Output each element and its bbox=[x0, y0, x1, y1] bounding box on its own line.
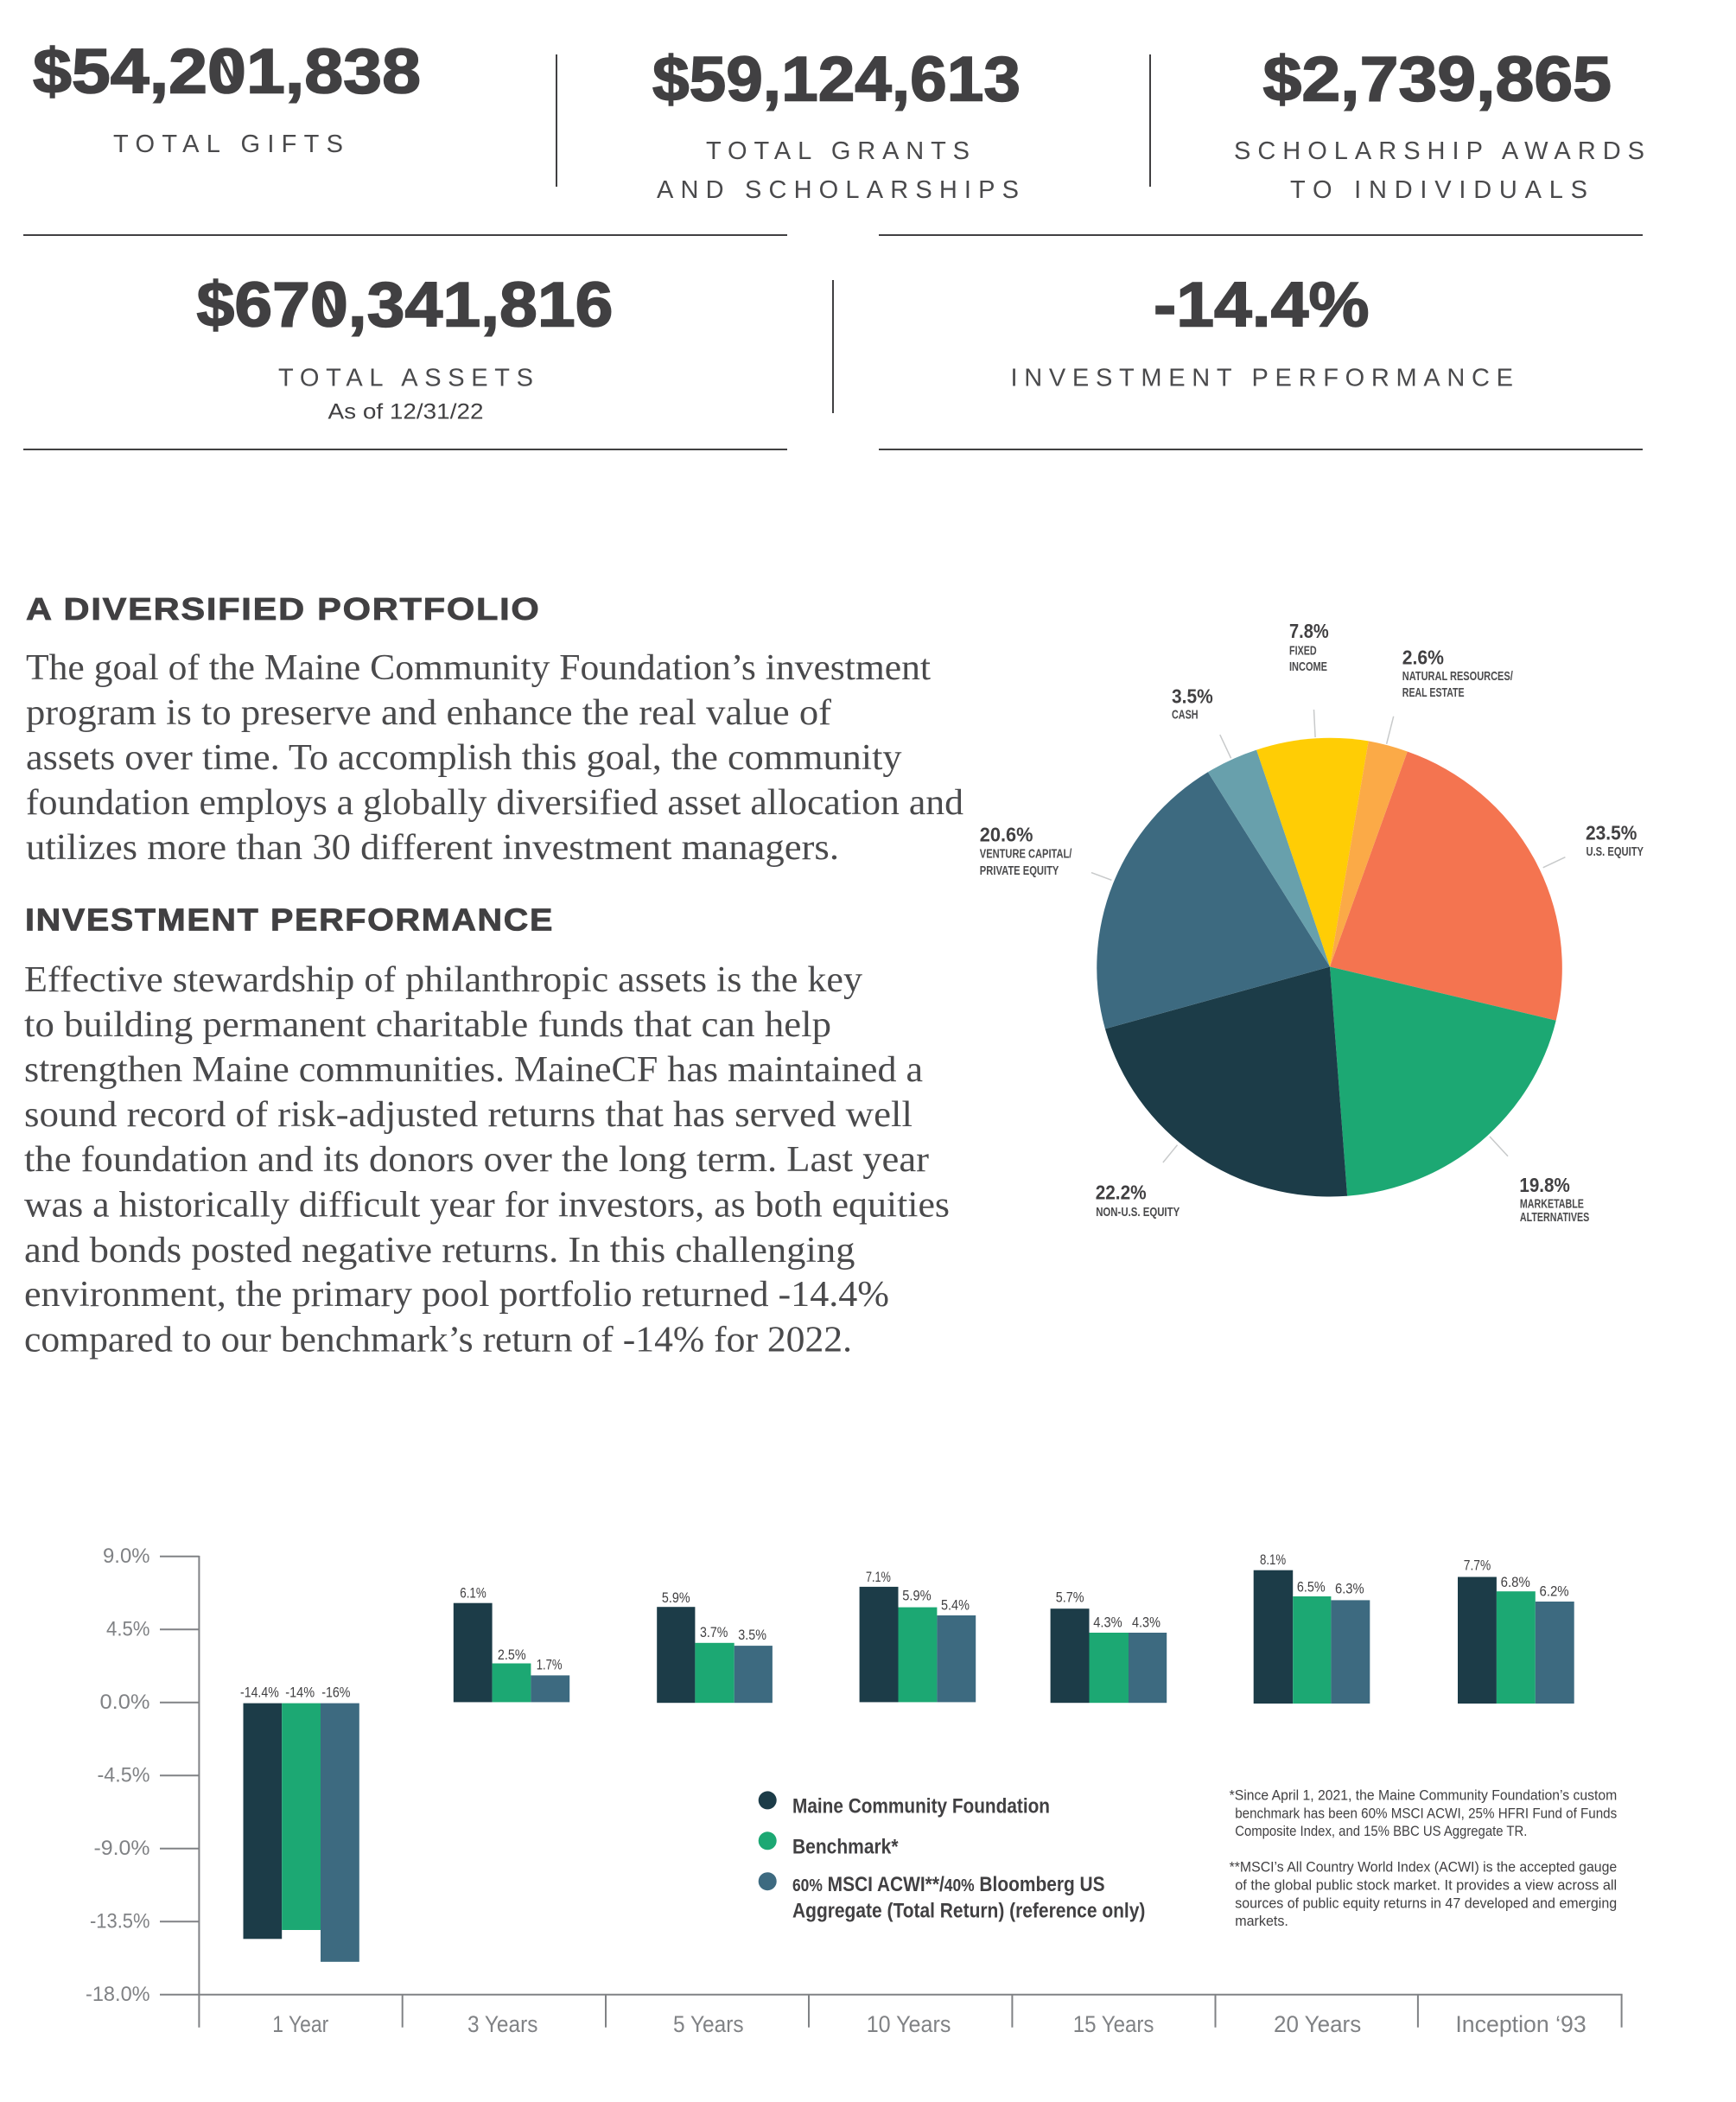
label: non-U.S. equity: NON-U.S. EQUITY bbox=[1096, 1205, 1180, 1220]
bars: 15 years bbox=[1051, 1590, 1167, 1703]
slice: cash bbox=[1208, 750, 1330, 966]
bars: 20 years: 6.5% bbox=[1297, 1580, 1326, 1596]
stat: investment performance bbox=[1011, 271, 1513, 392]
stat: total gifts bbox=[33, 36, 421, 158]
footnotes: benchmark has been 60% MSCI ACWI, 25% HFRI Fund of Funds bbox=[1235, 1805, 1617, 1821]
bars: 3 years bbox=[454, 1586, 569, 1702]
label: non-U.S. equity: 22.2% bbox=[1096, 1182, 1147, 1204]
text block: performance description: to building permanent charitable funds that can help bbox=[24, 1005, 831, 1045]
footnotes: of the global public stock market. It provides a view across all bbox=[1235, 1877, 1617, 1893]
x axis labels bbox=[272, 2011, 1587, 2037]
bars: 1 year: -14.4% bbox=[240, 1685, 279, 1701]
label: natural resources bbox=[1402, 647, 1513, 700]
legend item: benchmark bbox=[759, 1831, 899, 1858]
stat: scholarship awards to individuals bbox=[1234, 44, 1644, 204]
x axis labels: 5 Years bbox=[673, 2011, 744, 2037]
bars: inception 1993 bbox=[1458, 1557, 1574, 1704]
legend bbox=[759, 1791, 1145, 1922]
text block: performance description: the foundation and its donors over the long term. Last year bbox=[24, 1140, 929, 1180]
label: venture capital: 20.6% bbox=[980, 823, 1033, 845]
stat: total gifts: TOTAL GIFTS bbox=[113, 131, 343, 158]
legend item: benchmark: Benchmark* bbox=[792, 1836, 899, 1858]
x axis labels: 10 Years bbox=[867, 2011, 951, 2037]
x axis labels: 15 Years bbox=[1073, 2011, 1154, 2037]
stats panel: top key figures bbox=[23, 36, 1644, 449]
y axis labels: -18.0% bbox=[86, 1983, 150, 2006]
x axis labels: 1 Year bbox=[272, 2011, 328, 2037]
bars: 5 years: 3.5% bbox=[738, 1627, 766, 1643]
stat: total assets: $670,341,816 bbox=[197, 271, 614, 341]
y axis labels: -13.5% bbox=[90, 1910, 150, 1933]
x axis labels: 3 Years bbox=[467, 2011, 537, 2037]
legend item: Maine Community Foundation: Maine Community Foundation bbox=[792, 1795, 1050, 1819]
y axis labels: -4.5% bbox=[97, 1763, 150, 1787]
footnotes: **MSCI’s All Country World Index (ACWI) is the accepted gauge bbox=[1230, 1859, 1617, 1876]
label: cash: 3.5% bbox=[1172, 685, 1213, 707]
y axis labels: -9.0% bbox=[93, 1837, 150, 1860]
text block: performance description: was a historically difficult year for investors, as both equities bbox=[24, 1186, 950, 1226]
bars: 10 years bbox=[860, 1570, 976, 1702]
label: marketable alternatives: 19.8% bbox=[1519, 1174, 1570, 1196]
bars: 10 years: 5.9% bbox=[902, 1588, 932, 1603]
stat: scholarship awards to individuals: $2,739,865 bbox=[1263, 44, 1612, 114]
label: marketable alternatives bbox=[1519, 1174, 1589, 1225]
chart axes and ticks bbox=[160, 1556, 1623, 2028]
stat: total assets: TOTAL ASSETS bbox=[278, 365, 533, 392]
label: U.S. equity: 23.5% bbox=[1586, 821, 1637, 844]
x axis labels: 20 Years bbox=[1274, 2011, 1361, 2037]
footnotes: markets. bbox=[1235, 1913, 1288, 1929]
bars: 1 year: -14% bbox=[285, 1685, 315, 1701]
bars: 20 years: 6.3% bbox=[1335, 1581, 1364, 1596]
bars: 3 years: 1.7% bbox=[537, 1657, 563, 1672]
text block: performance description: and bonds posted negative returns. In this challenging bbox=[24, 1231, 855, 1271]
legend item: reference index bbox=[759, 1872, 1145, 1922]
text block: portfolio description: program is to preserve and enhance the real value of bbox=[26, 693, 831, 733]
x axis labels: Inception ‘93 bbox=[1455, 2011, 1587, 2037]
bars: 15 years: 5.7% bbox=[1056, 1590, 1084, 1606]
label: fixed income bbox=[1289, 620, 1329, 674]
label: fixed income: 7.8% bbox=[1289, 620, 1329, 642]
label: venture capital: VENTURE CAPITAL/ bbox=[980, 847, 1072, 862]
stat: scholarship awards to individuals: SCHOLARSHIP AWARDS bbox=[1234, 137, 1644, 165]
stat: investment performance: INVESTMENT PERFORMANCE bbox=[1011, 365, 1513, 392]
bars: 10 years: 7.1% bbox=[866, 1570, 891, 1585]
stat: total assets: As of 12/31/22 bbox=[328, 399, 484, 424]
stat: total grants and scholarships: TOTAL GRANTS bbox=[706, 137, 970, 165]
bars: 1 year: -16% bbox=[321, 1685, 351, 1701]
heading: investment performance: INVESTMENT PERFORMANCE bbox=[25, 902, 554, 938]
bars: 1 year bbox=[240, 1685, 359, 1962]
text block: performance description: sound record of risk-adjusted returns that has served well bbox=[24, 1095, 913, 1135]
bars: 5 years: 5.9% bbox=[662, 1590, 690, 1606]
slice: non-U.S. equity bbox=[1105, 966, 1347, 1197]
label: cash: CASH bbox=[1172, 708, 1199, 723]
bars: 20 years: 8.1% bbox=[1260, 1552, 1286, 1568]
slice: venture capital / private equity bbox=[1097, 772, 1330, 1029]
text block: performance description: strengthen Maine communities. MaineCF has maintained a bbox=[24, 1050, 923, 1090]
footnotes bbox=[1230, 1787, 1617, 1929]
heading: a diversified portfolio: A DIVERSIFIED PORTFOLIO bbox=[26, 591, 541, 627]
stat: total assets bbox=[197, 271, 614, 424]
footnotes: sources of public equity returns in 47 developed and emerging bbox=[1235, 1895, 1617, 1911]
stat: investment performance: -14.4% bbox=[1154, 271, 1369, 341]
slice: natural resources / real estate bbox=[1330, 741, 1408, 966]
stat: total grants and scholarships: $59,124,613 bbox=[652, 44, 1021, 114]
label: natural resources: 2.6% bbox=[1402, 647, 1444, 669]
label: fixed income: FIXED bbox=[1289, 644, 1317, 659]
text block: portfolio description: foundation employs a globally diversified asset allocation and bbox=[26, 783, 963, 823]
label: cash bbox=[1172, 685, 1213, 723]
slice: U.S. equity bbox=[1330, 752, 1562, 1021]
y axis labels bbox=[86, 1545, 150, 2006]
text block: portfolio description: The goal of the Maine Community Foundation’s investment bbox=[26, 648, 931, 688]
bar chart: returns by time period bbox=[86, 1545, 1623, 2037]
bars: inception 1993: 6.2% bbox=[1540, 1583, 1569, 1599]
bars: 3 years: 6.1% bbox=[460, 1586, 486, 1602]
text block: portfolio description bbox=[26, 648, 963, 868]
text block: portfolio description: utilizes more than 30 different investment managers. bbox=[26, 828, 839, 868]
pie chart: asset allocation bbox=[980, 620, 1644, 1225]
bars: 15 years: 4.3% bbox=[1132, 1615, 1161, 1630]
legend item: reference index: 60% MSCI ACWI**/40% Bloomberg US bbox=[792, 1873, 1105, 1896]
slice: fixed income bbox=[1256, 738, 1369, 966]
text block: performance description: compared to our benchmark’s return of -14% for 2022. bbox=[24, 1321, 852, 1360]
bars: 3 years: 2.5% bbox=[498, 1647, 526, 1663]
label: marketable alternatives: MARKETABLE bbox=[1520, 1196, 1584, 1211]
legend item: Maine Community Foundation bbox=[759, 1791, 1050, 1819]
text block: performance description bbox=[24, 960, 950, 1360]
label: natural resources: REAL ESTATE bbox=[1402, 685, 1465, 700]
text block: performance description: Effective stewardship of philanthropic assets is the key bbox=[24, 960, 862, 1000]
y axis labels: 0.0% bbox=[100, 1691, 150, 1714]
footnotes: Composite Index, and 15% BBC US Aggregate TR. bbox=[1235, 1823, 1527, 1839]
text block: portfolio description: assets over time. To accomplish this goal, the community bbox=[26, 738, 902, 778]
stat: total gifts: $54,201,838 bbox=[33, 36, 421, 106]
stat: total grants and scholarships bbox=[652, 44, 1021, 204]
y axis labels: 9.0% bbox=[103, 1545, 150, 1568]
label: U.S. equity: U.S. EQUITY bbox=[1587, 844, 1644, 859]
label: venture capital bbox=[980, 823, 1072, 878]
footnotes: *Since April 1, 2021, the Maine Community Foundation’s custom bbox=[1230, 1787, 1617, 1803]
slice: marketable alternatives bbox=[1330, 966, 1556, 1196]
label: venture capital: PRIVATE EQUITY bbox=[980, 863, 1059, 878]
label: U.S. equity bbox=[1586, 821, 1644, 859]
label: non-U.S. equity bbox=[1096, 1182, 1180, 1220]
bars: inception 1993: 6.8% bbox=[1501, 1575, 1530, 1590]
bars: 5 years bbox=[657, 1590, 773, 1703]
label: natural resources: NATURAL RESOURCES/ bbox=[1402, 669, 1513, 684]
label: fixed income: INCOME bbox=[1289, 659, 1327, 674]
bars: inception 1993: 7.7% bbox=[1464, 1557, 1491, 1573]
y axis labels: 4.5% bbox=[106, 1618, 150, 1640]
bars: 5 years: 3.7% bbox=[700, 1625, 728, 1640]
text block: performance description: environment, the primary pool portfolio returned -14.4% bbox=[24, 1275, 889, 1315]
label: marketable alternatives: ALTERNATIVES bbox=[1520, 1210, 1589, 1225]
bars: 20 years bbox=[1254, 1552, 1370, 1704]
stat: total grants and scholarships: AND SCHOLARSHIPS bbox=[657, 176, 1019, 204]
stat: scholarship awards to individuals: TO INDIVIDUALS bbox=[1290, 176, 1587, 204]
bars: 15 years: 4.3% bbox=[1093, 1615, 1122, 1630]
bars: 10 years: 5.4% bbox=[941, 1597, 970, 1613]
legend item: reference index: Aggregate (Total Return) (reference only) bbox=[792, 1899, 1145, 1922]
